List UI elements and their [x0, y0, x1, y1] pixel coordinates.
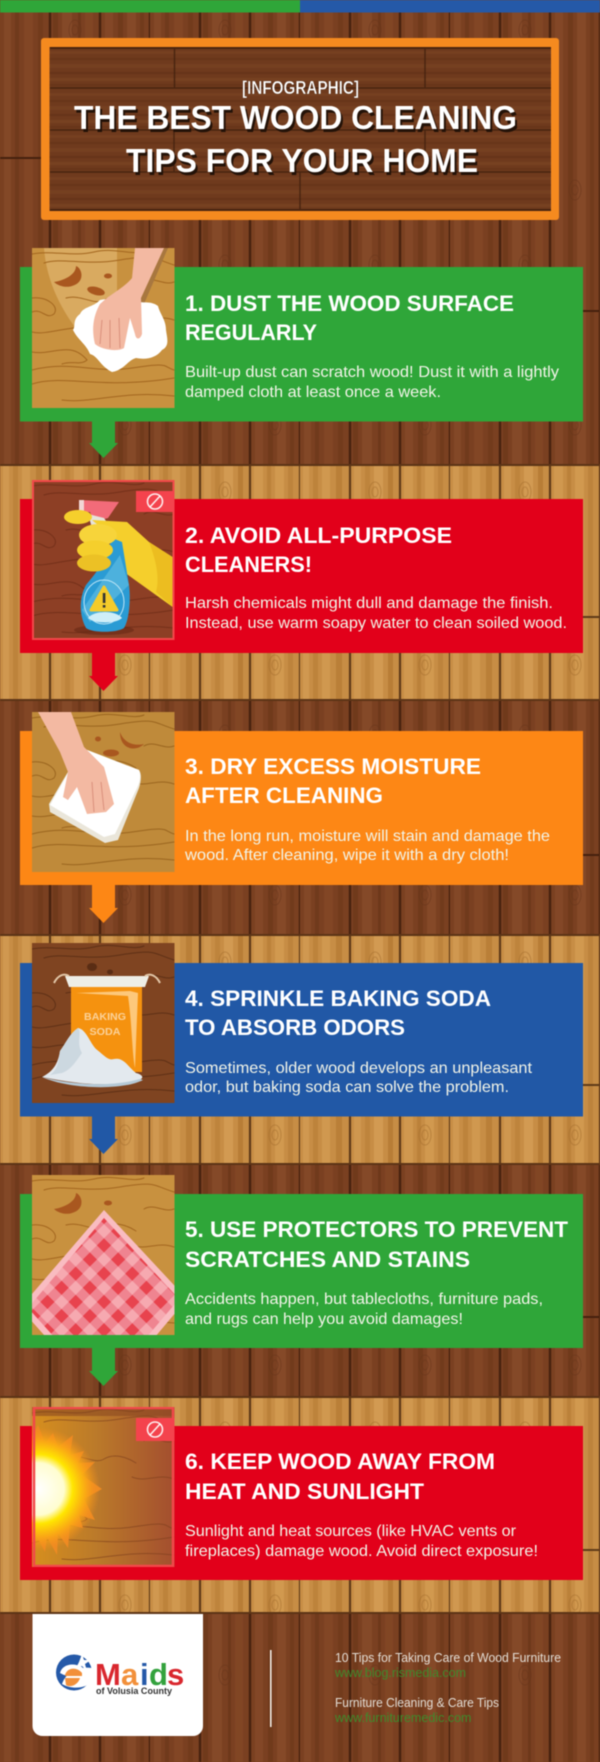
icon: baking soda box: SODA	[90, 1026, 121, 1038]
heading: 3. DRY EXCESS MOISTURE	[185, 754, 481, 779]
body text: Accidents happen, but tablecloths, furniture pads,	[185, 1291, 543, 1308]
arrow 3	[89, 884, 118, 923]
heading	[185, 291, 514, 345]
heading	[185, 523, 452, 577]
heading: CLEANERS!	[185, 552, 312, 577]
body text: and rugs can help you avoid damages!	[185, 1311, 463, 1328]
icon: logo swoosh	[56, 1654, 92, 1690]
panel: tip 2	[20, 480, 583, 653]
logo wordmark: M	[95, 1657, 121, 1692]
heading	[185, 986, 491, 1040]
logo wordmark: a	[121, 1657, 139, 1692]
footer sources	[334, 1651, 561, 1725]
body text	[185, 1523, 538, 1560]
panel: tip 1	[20, 248, 583, 422]
arrow 5	[89, 1347, 118, 1386]
body text: odor, but baking soda can solve the problem.	[185, 1079, 509, 1096]
icon: gingham tablecloth on wood	[31, 1174, 176, 1336]
body text: wood. After cleaning, wipe it with a dry cloth!	[184, 847, 509, 864]
footer sources: www.blog.rismedia.com	[334, 1666, 466, 1680]
footer divider	[270, 1650, 272, 1727]
heading: 2. AVOID ALL-PURPOSE	[185, 523, 452, 548]
heading: AFTER CLEANING	[185, 783, 383, 808]
heading: 6. KEEP WOOD AWAY FROM	[185, 1449, 495, 1474]
arrow 4	[89, 1115, 118, 1154]
footer sources: 10 Tips for Taking Care of Wood Furniture	[335, 1651, 561, 1665]
footer sources: www.furnituremedic.com	[334, 1711, 472, 1725]
title panel	[41, 38, 559, 220]
icon: baking soda box	[31, 942, 176, 1104]
icon: spray bottle in yellow glove	[32, 479, 175, 640]
title heading: TIPS FOR YOUR HOME	[128, 145, 480, 182]
logo tagline: of Volusia County	[96, 1686, 173, 1697]
title heading: THE BEST WOOD CLEANING	[74, 99, 517, 136]
panel: tip 3	[20, 712, 583, 885]
heading: REGULARLY	[185, 320, 317, 345]
footer sources: Furniture Cleaning & Care Tips	[335, 1696, 499, 1710]
panel: tip 5	[20, 1175, 583, 1400]
body text: Instead, use warm soapy water to clean soiled wood.	[185, 615, 567, 632]
heading: 5. USE PROTECTORS TO PREVENT	[185, 1217, 568, 1242]
icon: hand dusting wood	[31, 247, 176, 409]
heading: 4. SPRINKLE BAKING SODA	[185, 986, 491, 1011]
title heading: THE BEST WOOD CLEANING	[76, 102, 519, 139]
icon: sun heating wood	[31, 1406, 175, 1568]
logo card	[32, 1614, 203, 1736]
heading	[185, 1449, 495, 1504]
heading: SCRATCHES AND STAINS	[185, 1247, 470, 1272]
arrow 2	[89, 652, 118, 691]
title heading	[74, 99, 519, 182]
panel: tip 4	[20, 943, 583, 1116]
body text: Sunlight and heat sources (like HVAC vents or	[185, 1523, 517, 1540]
top colour bar	[0, 0, 600, 12]
arrow 1	[89, 420, 118, 458]
logo wordmark: d	[149, 1657, 168, 1692]
body text: Built-up dust can scratch wood! Dust it with a lightly	[185, 364, 559, 381]
title eyebrow: [INFOGRAPHIC]	[242, 78, 359, 98]
icon: baking soda box: BAKING	[84, 1011, 126, 1023]
body text: Sometimes, older wood develops an unpleasant	[185, 1060, 533, 1077]
icon: hand wiping with dry towel	[32, 711, 175, 872]
logo wordmark: s	[167, 1657, 184, 1692]
heading	[185, 754, 481, 808]
body text: Harsh chemicals might dull and damage the finish.	[185, 595, 553, 612]
body text: fireplaces) damage wood. Avoid direct exposure!	[185, 1543, 538, 1560]
body text: In the long run, moisture will stain and damage the	[185, 828, 550, 845]
heading: TO ABSORB ODORS	[185, 1015, 405, 1040]
title heading: TIPS FOR YOUR HOME	[126, 142, 478, 179]
body text	[185, 595, 567, 632]
heading	[185, 1217, 568, 1272]
panel: tip 6	[0, 1407, 583, 1580]
body text: damped cloth at least once a week.	[185, 384, 441, 401]
body text	[185, 364, 559, 401]
body text	[185, 1060, 533, 1096]
body text	[184, 828, 550, 864]
heading: HEAT AND SUNLIGHT	[185, 1479, 424, 1504]
heading: 1. DUST THE WOOD SURFACE	[185, 291, 514, 316]
body text	[185, 1291, 543, 1328]
logo wordmark: i	[140, 1657, 149, 1692]
